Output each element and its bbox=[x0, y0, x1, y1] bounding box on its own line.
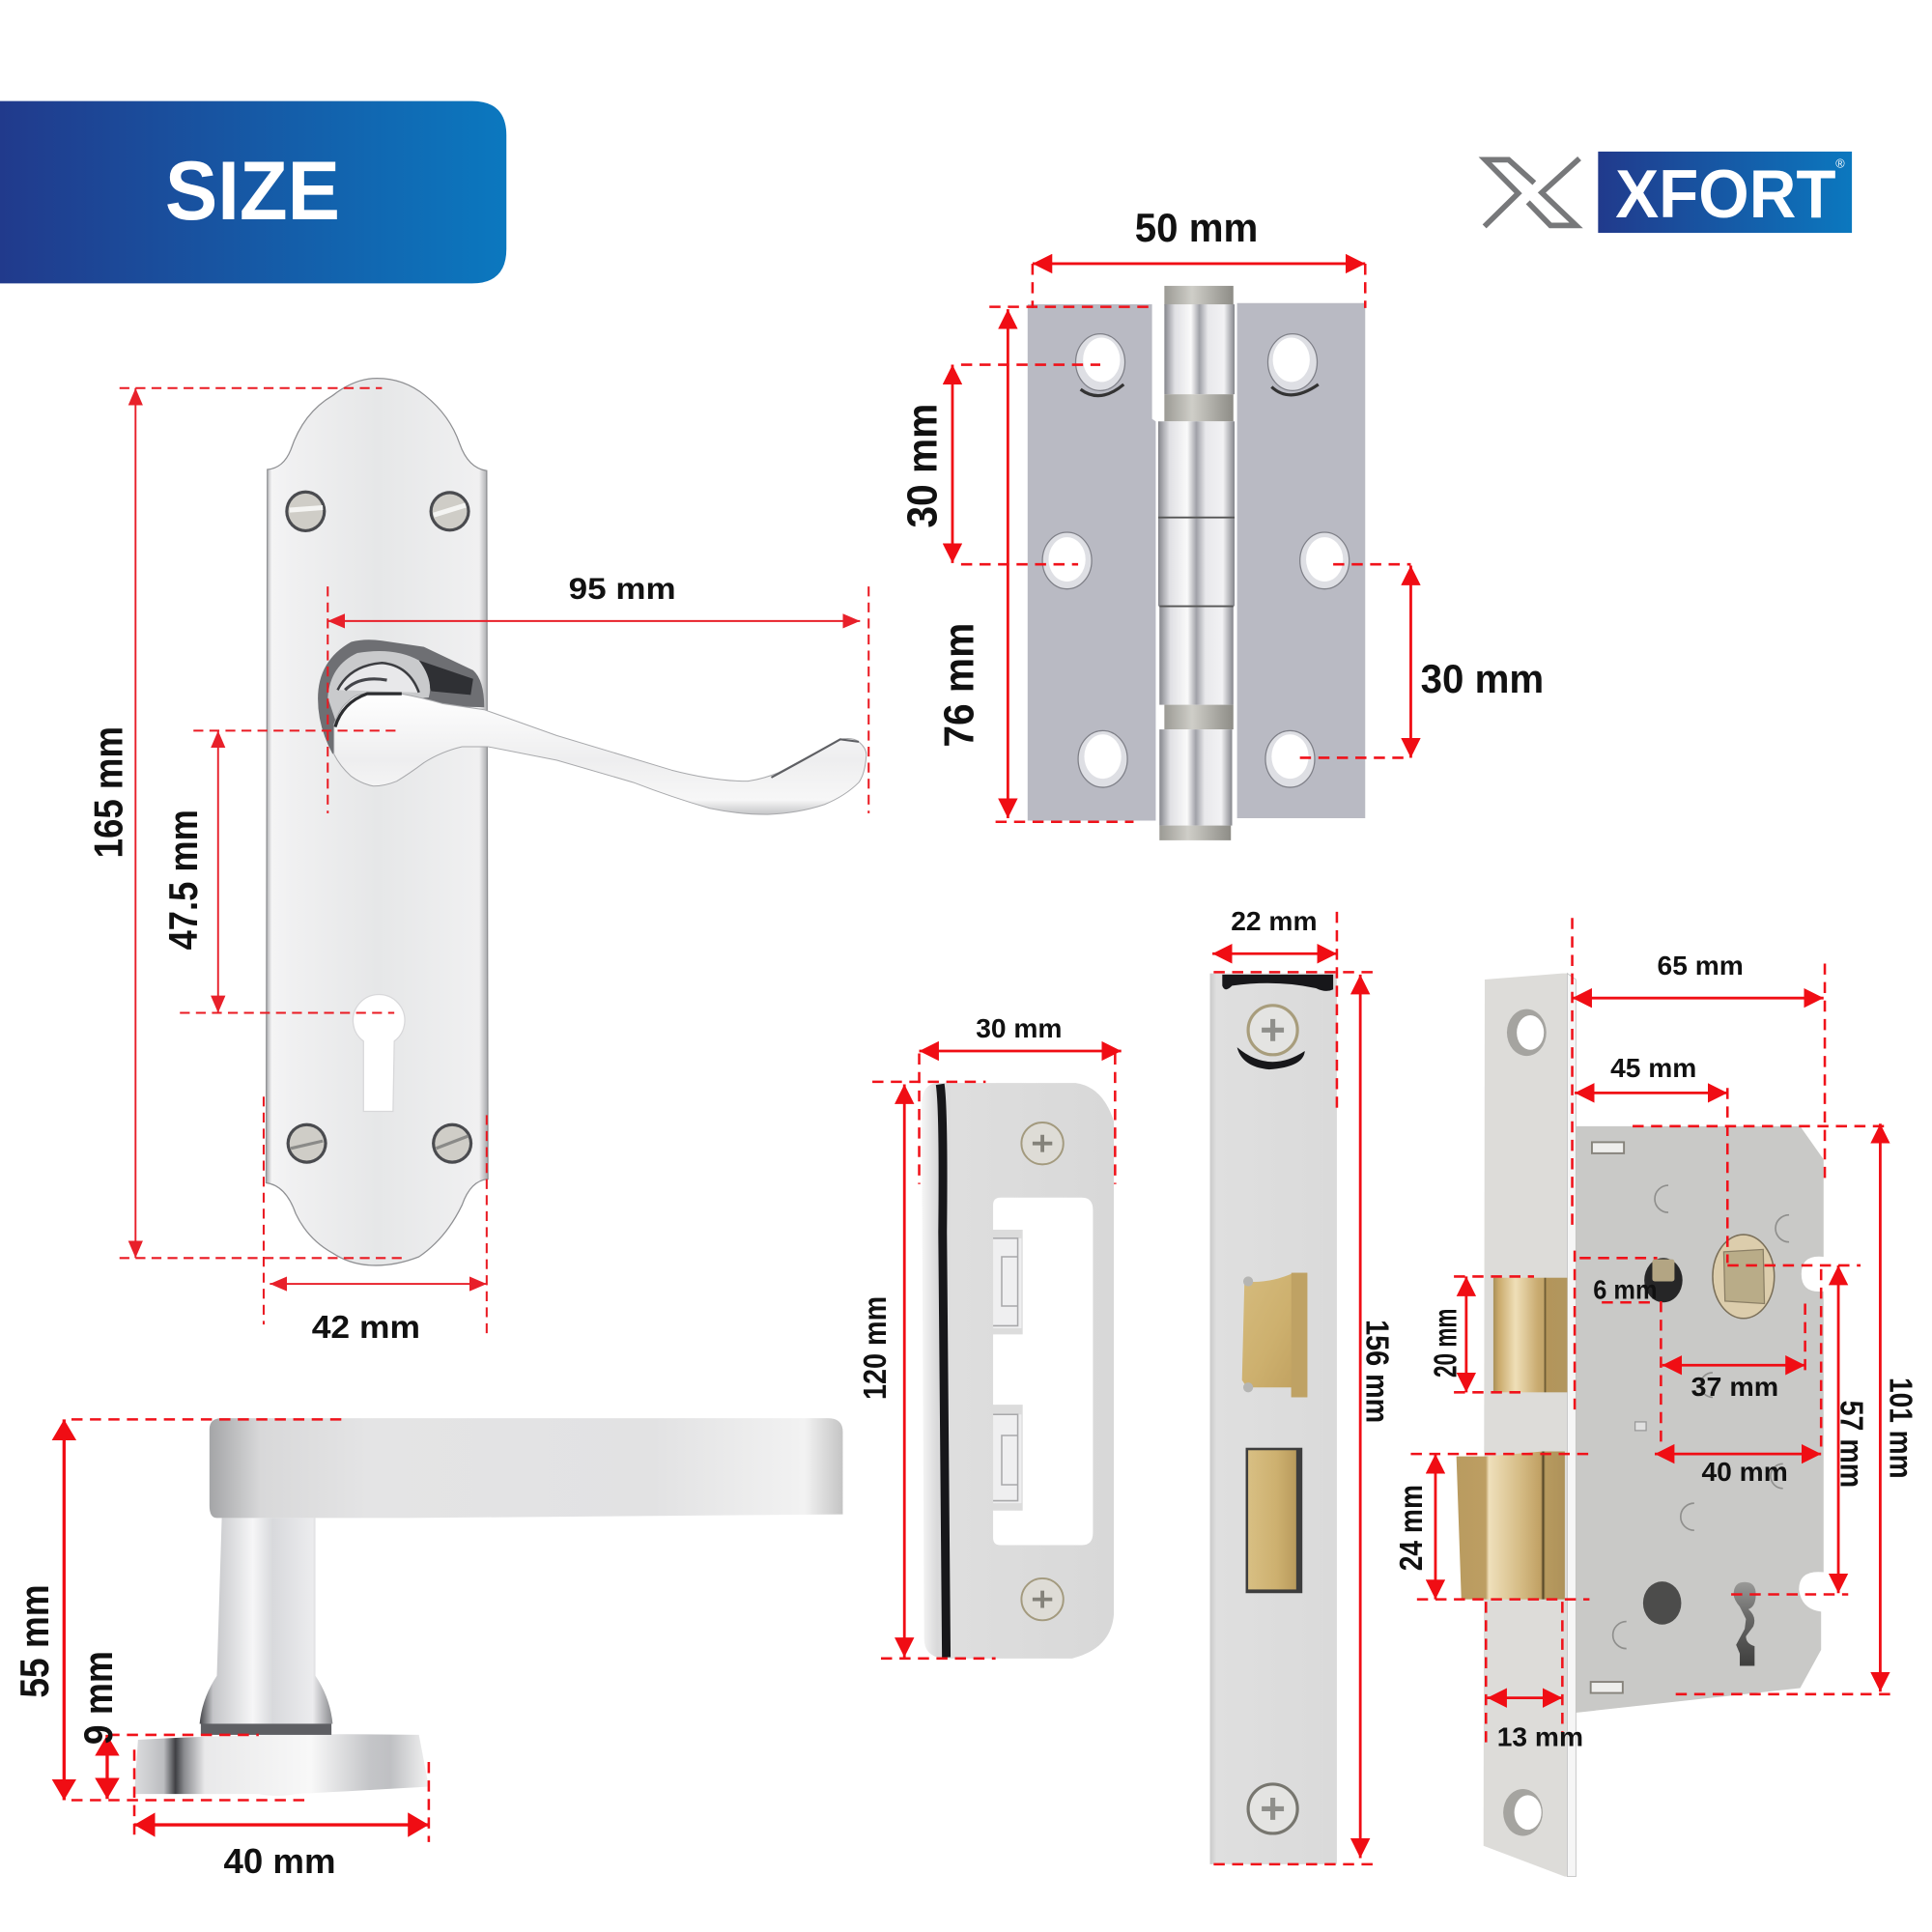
title banner: SIZE: SIZE bbox=[165, 144, 340, 238]
dimension: 40 mm: 40 mm bbox=[224, 1842, 336, 1881]
face plate screws bbox=[1248, 1006, 1297, 1833]
dimension: 65 mm: 65 mm bbox=[1658, 951, 1744, 980]
dimension: 6 mm bbox=[1575, 1251, 1658, 1414]
product: mortice lock case bbox=[1457, 974, 1824, 1877]
dimension: 165 mm: 165 mm bbox=[85, 726, 130, 858]
dimension: 30 mm left bbox=[899, 365, 1100, 564]
dimension: 165 mm bbox=[85, 388, 407, 1258]
lock body bbox=[1576, 1126, 1824, 1713]
dimension: 47.5 mm bbox=[160, 730, 397, 1012]
dimension: 95 mm bbox=[327, 571, 868, 813]
strike plate body bbox=[922, 1083, 1114, 1659]
dimensions: forend plate bbox=[1212, 906, 1395, 1864]
dimension: 13 mm: 13 mm bbox=[1497, 1721, 1583, 1751]
dimension: 101 mm: 101 mm bbox=[1883, 1378, 1918, 1479]
dimension: 30 mm: 30 mm bbox=[976, 1013, 1062, 1043]
dimension: 40 mm: 40 mm bbox=[1701, 1457, 1788, 1487]
dimension: 45 mm: 45 mm bbox=[1610, 1053, 1696, 1083]
dimension: 30 mm left: 30 mm bbox=[899, 404, 946, 528]
dimension: 13 mm bbox=[1486, 1602, 1583, 1751]
strike screws bbox=[1021, 1122, 1064, 1620]
dimension: 76 mm bbox=[937, 307, 1152, 822]
dimensions: strike plate bbox=[858, 1013, 1122, 1659]
dimensions: scroll lever handle bbox=[85, 388, 868, 1346]
dimension: 55 mm: 55 mm bbox=[12, 1584, 57, 1698]
brass dead bolt bbox=[1457, 1452, 1565, 1600]
brass latch bolt bbox=[1493, 1278, 1567, 1392]
case slots bbox=[1591, 1142, 1646, 1693]
hinge leaves bbox=[1028, 304, 1155, 820]
dimension: 55 mm bbox=[12, 1419, 343, 1801]
brass bolt bbox=[1246, 1448, 1302, 1593]
dimension: 30 mm right: 30 mm bbox=[1421, 656, 1544, 701]
dimension: 6 mm: 6 mm bbox=[1593, 1274, 1658, 1304]
dimension: 24 mm: 24 mm bbox=[1394, 1485, 1430, 1571]
dimension: 50 mm: 50 mm bbox=[1135, 205, 1258, 250]
rose base bbox=[134, 1734, 429, 1796]
dimension: 30 mm bbox=[920, 1013, 1122, 1184]
strike opening bbox=[993, 1198, 1093, 1545]
backplate bbox=[267, 379, 488, 1265]
dimension: 22 mm: 22 mm bbox=[1231, 906, 1318, 936]
title banner: SIZE bbox=[0, 101, 506, 283]
dimension: 120 mm bbox=[858, 1082, 996, 1659]
strike tabs bbox=[993, 1238, 1021, 1503]
dimension: 30 mm right bbox=[1300, 564, 1544, 757]
hinge knuckles bbox=[1158, 286, 1235, 840]
follower hole bbox=[1644, 1258, 1683, 1302]
key way bbox=[1734, 1582, 1756, 1665]
product: strike plate bbox=[922, 1083, 1114, 1659]
dimension: 42 mm bbox=[264, 1096, 487, 1346]
brass latch bbox=[1242, 1273, 1307, 1397]
product: forend face plate bbox=[1210, 974, 1337, 1864]
lock face plate bbox=[1484, 974, 1574, 1877]
dimension: 9 mm: 9 mm bbox=[75, 1651, 121, 1745]
hinge screw holes bbox=[1042, 334, 1350, 787]
logo: XFORT bbox=[1485, 152, 1852, 233]
screws on backplate bbox=[285, 491, 472, 1164]
dimension: 50 mm bbox=[1033, 205, 1365, 308]
logo mark bbox=[1485, 158, 1579, 226]
product: butt hinge bbox=[1028, 286, 1365, 840]
dimension: 20 mm bbox=[1429, 1276, 1534, 1392]
lock fixing holes bbox=[1503, 1009, 1547, 1836]
product: scroll lever handle on backplate bbox=[267, 379, 867, 1265]
dimension: 57 mm bbox=[1727, 1265, 1869, 1595]
dimensions: mortice lock bbox=[1394, 918, 1918, 1751]
stem bbox=[200, 1518, 332, 1723]
dimension: 65 mm bbox=[1573, 918, 1825, 1233]
dimension: 47.5 mm: 47.5 mm bbox=[160, 810, 206, 950]
dimension: 42 mm: 42 mm bbox=[312, 1310, 420, 1346]
logo wordmark: ® bbox=[1835, 156, 1845, 170]
lever arm bbox=[334, 694, 867, 814]
logo wordmark: XFORT bbox=[1615, 156, 1836, 232]
dimension: 40 mm bbox=[134, 1749, 429, 1881]
dimension: 37 mm: 37 mm bbox=[1691, 1372, 1778, 1402]
dimension: 76 mm: 76 mm bbox=[937, 623, 983, 748]
product: lever handle side view bbox=[134, 1418, 842, 1796]
dimension: 37 mm bbox=[1661, 1301, 1805, 1448]
dimension: 57 mm: 57 mm bbox=[1833, 1401, 1869, 1488]
dimension: 24 mm bbox=[1394, 1454, 1589, 1600]
lower hole bbox=[1643, 1581, 1681, 1625]
dimension: 101 mm bbox=[1633, 1123, 1918, 1694]
dimension: 120 mm: 120 mm bbox=[858, 1296, 894, 1400]
keyhole bbox=[353, 994, 405, 1112]
case rivet marks bbox=[1613, 1185, 1789, 1649]
dimensions: side view handle bbox=[12, 1419, 429, 1881]
dimension: 156 mm bbox=[1213, 972, 1395, 1864]
lever bar bbox=[210, 1418, 842, 1518]
dimensions: hinge bbox=[899, 205, 1544, 822]
lever rose bbox=[318, 639, 484, 754]
dimension: 20 mm: 20 mm bbox=[1429, 1309, 1464, 1378]
dimension: 156 mm: 156 mm bbox=[1359, 1320, 1395, 1423]
dimension: 95 mm: 95 mm bbox=[569, 571, 676, 606]
spindle follower bbox=[1713, 1235, 1775, 1319]
